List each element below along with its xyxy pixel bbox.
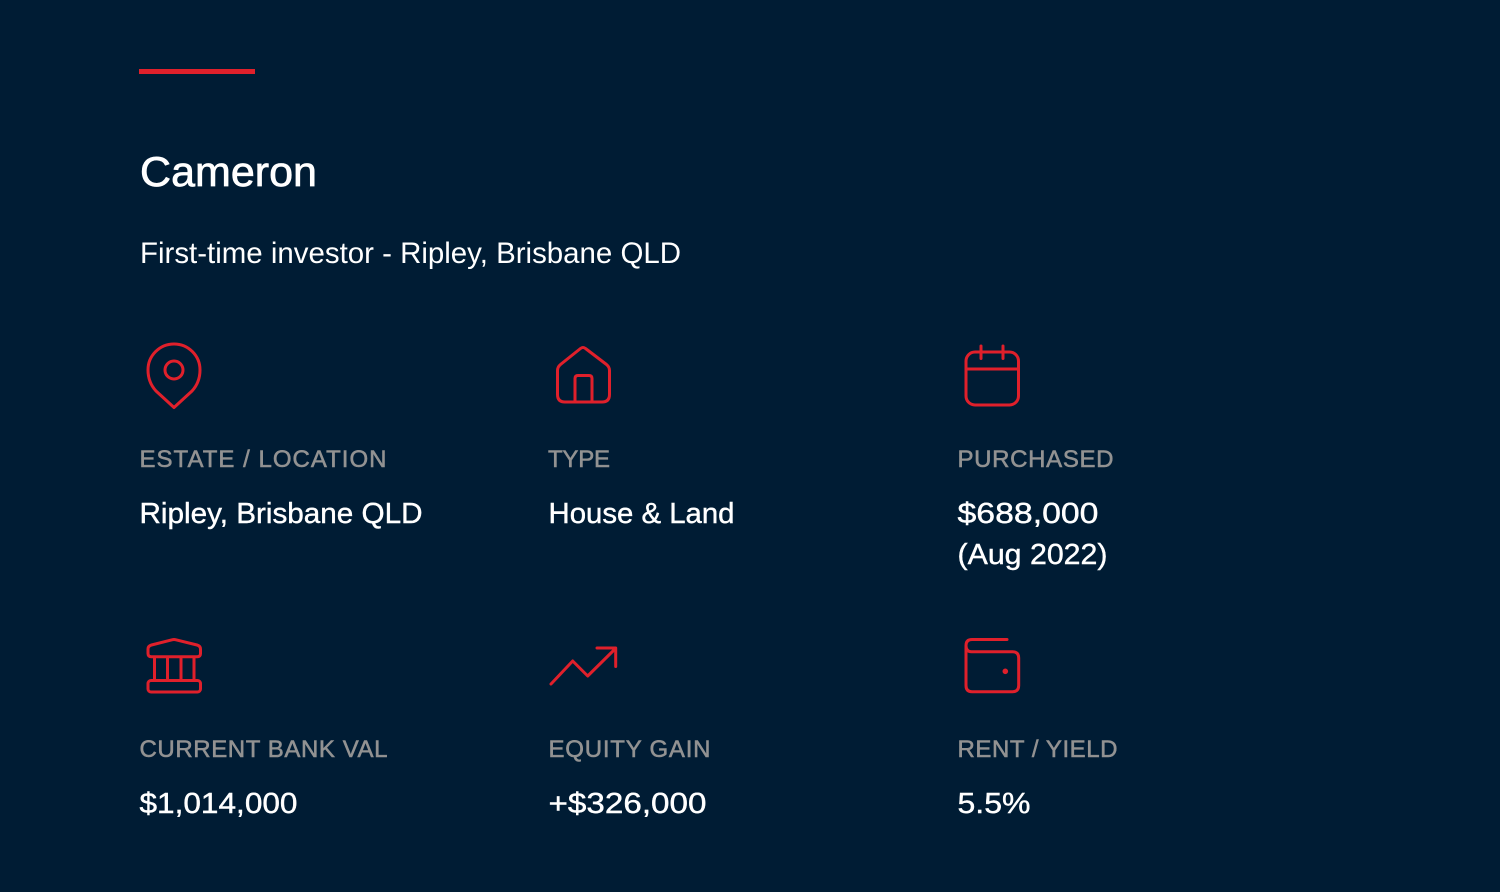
value: location: Ripley, Brisbane QLD	[140, 498, 422, 530]
label: estate / location: ESTATE / LOCATION	[140, 446, 386, 473]
value: bank valuation: $1,014,000	[140, 788, 298, 820]
icon: map pin	[148, 344, 200, 408]
panel: purchased	[958, 346, 1114, 571]
value: rent yield: 5.5%	[958, 788, 1030, 820]
panel: estate / location	[140, 344, 422, 530]
subtitle: First-time investor - Ripley, Brisbane QLD	[140, 237, 681, 270]
value: type: House & Land	[548, 498, 734, 530]
panel: type	[548, 348, 734, 530]
label: rent / yield: RENT / YIELD	[958, 736, 1118, 763]
label: type: TYPE	[548, 446, 610, 473]
icon: trend arrow	[551, 648, 616, 684]
value: equity gain: +$326,000	[548, 788, 706, 820]
label: equity gain: EQUITY GAIN	[548, 736, 710, 763]
icon: calendar	[966, 346, 1018, 405]
icon: wallet	[966, 640, 1019, 692]
panel: rent / yield	[958, 640, 1118, 820]
panel: current bank val	[140, 640, 388, 820]
label: current bank val: CURRENT BANK VAL	[140, 736, 388, 763]
label: purchased: PURCHASED	[958, 446, 1114, 473]
title: Cameron	[140, 148, 317, 195]
value: purchase price: $688,000	[958, 498, 1098, 530]
panel: equity gain	[548, 648, 710, 820]
icon: bank	[148, 640, 200, 692]
red accent bar	[139, 69, 255, 74]
value: purchase date: (Aug 2022)	[958, 539, 1108, 571]
icon: house	[558, 348, 610, 402]
